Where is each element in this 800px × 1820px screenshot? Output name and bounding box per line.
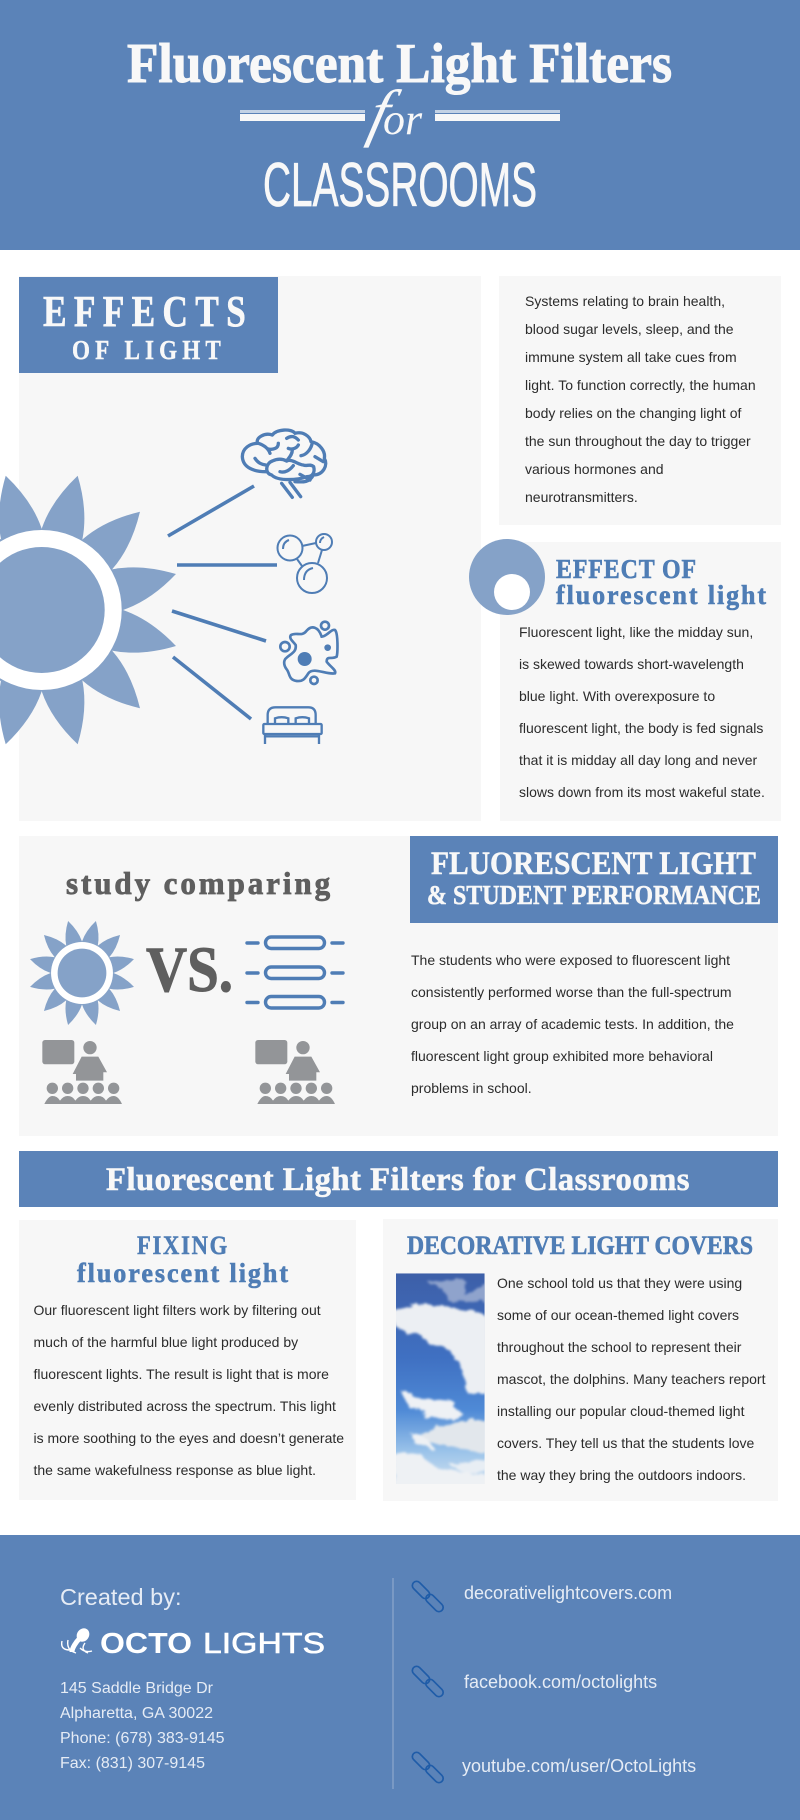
heading: fluorescent light and student performance: & STUDENT PERFORMANCE <box>427 880 761 910</box>
text block: study results: The students who were exposed to fluorescent light <box>411 952 730 968</box>
heading: fixing fluorescent light <box>77 1231 290 1288</box>
text block: fluorescent light description: fluorescent light, the body is fed signals <box>519 720 763 736</box>
heading: study comparing: study comparing <box>66 865 333 901</box>
heading: effects of light <box>19 277 278 373</box>
heading: fixing fluorescent light: fluorescent light <box>77 1258 290 1288</box>
text block: how filters work: much of the harmful blue light produced by <box>34 1334 298 1350</box>
footer <box>0 1535 800 1820</box>
icon: link youtube <box>411 1751 445 1784</box>
text block: fluorescent light description: is skewed towards short-wavelength <box>519 656 744 672</box>
heading: fluorescent light and student performance: FLUORESCENT LIGHT <box>431 846 756 882</box>
panel: effect of fluorescent light <box>469 539 781 821</box>
panel: fixing fluorescent light <box>19 1220 356 1500</box>
divider <box>392 1578 394 1789</box>
text block: decorative covers: mascot, the dolphins. Many teachers report <box>497 1371 766 1387</box>
text block: decorative covers: One school told us that they were using <box>497 1275 742 1291</box>
heading: effect of fluorescent light: EFFECT OF <box>556 554 697 584</box>
icon: link website <box>411 1580 445 1613</box>
icon: link facebook <box>411 1665 445 1698</box>
text block: systems relating to light: body relies on the changing light of <box>525 405 741 421</box>
text block: fluorescent light description: Fluorescent light, like the midday sun, <box>519 624 753 640</box>
logo: octo lights <box>62 1626 325 1660</box>
text block: decorative covers: covers. They tell us that the students love <box>497 1435 755 1451</box>
text block: study results: group on an array of academic tests. In addition, the <box>411 1016 734 1032</box>
text: created by: Created by: <box>60 1584 181 1610</box>
text block: study results: problems in school. <box>411 1080 532 1096</box>
section banner: filters for classrooms: Fluorescent Light Filters for Classrooms <box>106 1162 690 1198</box>
text block: systems relating to light: Systems relating to brain health, <box>525 293 725 309</box>
title: for <box>362 78 423 149</box>
icon: large sun <box>0 470 181 750</box>
heading: effects of light: EFFECTS <box>43 287 253 336</box>
text block: address: Alpharetta, GA 30022 <box>60 1705 213 1722</box>
image: cloud sky <box>396 1273 485 1484</box>
text block: systems relating to light: various hormones and <box>525 461 664 477</box>
header banner <box>0 0 800 250</box>
text block: decorative covers: installing our popular cloud-themed light <box>497 1403 745 1419</box>
text block: systems relating to light: blood sugar levels, sleep, and the <box>525 321 734 337</box>
text block: address: Fax: (831) 307-9145 <box>60 1755 205 1772</box>
panel: study comparing <box>19 836 778 1136</box>
text block: systems relating to light: light. To function correctly, the human <box>525 377 756 393</box>
text block: decorative covers: throughout the school to represent their <box>497 1339 742 1355</box>
link text: facebook: facebook.com/octolights <box>464 1672 657 1692</box>
text block: study results: fluorescent light group exhibited more behavioral <box>411 1048 713 1064</box>
text block: how filters work: the same wakefulness response as blue light. <box>34 1462 316 1478</box>
label: VS.: VS. <box>146 934 233 1006</box>
icon: classroom right <box>255 1040 335 1104</box>
icon: brain <box>242 430 326 497</box>
text block: decorative covers: some of our ocean-themed light covers <box>497 1307 739 1323</box>
icon: small sun <box>28 919 136 1027</box>
panel: effects of light <box>0 276 481 821</box>
title rule: left <box>240 110 365 121</box>
text block: decorative covers: the way they bring the outdoors indoors. <box>497 1467 746 1483</box>
text block: systems relating to light: immune system all take cues from <box>525 349 737 365</box>
text block: how filters work: Our fluorescent light filters work by filtering out <box>34 1302 321 1318</box>
heading: fixing fluorescent light: FIXING <box>137 1231 229 1260</box>
text block: how filters work: evenly distributed across the spectrum. This light <box>34 1398 336 1414</box>
text block: address: 145 Saddle Bridge Dr <box>60 1680 214 1697</box>
heading: effect of fluorescent light <box>556 554 768 610</box>
heading: effect of fluorescent light: fluorescent light <box>556 580 768 610</box>
title: for: or <box>383 95 423 144</box>
heading: fluorescent light and student performance <box>410 836 778 923</box>
link text: youtube: youtube.com/user/OctoLights <box>462 1756 696 1776</box>
title rule: right <box>435 110 560 121</box>
text block: fluorescent light description: blue light. With overexposure to <box>519 688 715 704</box>
panel: intro text <box>499 276 781 525</box>
heading: effects of light: OF LIGHT <box>72 335 226 365</box>
text block: fluorescent light description: that it is midday all day long and never <box>519 752 757 768</box>
arrow lines: sun to icons <box>168 486 277 719</box>
title: CLASSROOMS: CLASSROOMS <box>263 151 537 220</box>
text block: how filters work: is more soothing to the eyes and doesn’t generate <box>34 1430 344 1446</box>
icon: cell <box>280 622 337 684</box>
text block: systems relating to light: the sun throughout the day to trigger <box>525 433 751 449</box>
section banner: filters for classrooms <box>19 1151 778 1207</box>
heading: decorative light covers: DECORATIVE LIGHT COVERS <box>407 1231 753 1260</box>
icon: classroom left <box>42 1040 122 1104</box>
text block: study results: consistently performed worse than the full-spectrum <box>411 984 732 1000</box>
logo: octo lights: OCTO <box>100 1628 192 1660</box>
panel: decorative light covers <box>396 1236 766 1484</box>
icon: fluorescent tubes <box>247 937 343 1008</box>
text block: how filters work: fluorescent lights. The result is light that is more <box>34 1366 329 1382</box>
text block: address: Phone: (678) 383-9145 <box>60 1730 225 1747</box>
text block: fluorescent light description: slows down from its most wakeful state. <box>519 784 765 800</box>
link text: website: decorativelightcovers.com <box>464 1583 672 1603</box>
logo: octo lights: LIGHTS <box>203 1628 325 1660</box>
icon: bed <box>263 707 322 744</box>
text block: systems relating to light: neurotransmitters. <box>525 489 638 505</box>
title: Fluorescent Light Filters: Fluorescent Light Filters <box>127 33 672 95</box>
icon: molecule <box>278 534 332 593</box>
title: for: f <box>362 78 406 149</box>
icon: circle badge <box>469 539 545 615</box>
